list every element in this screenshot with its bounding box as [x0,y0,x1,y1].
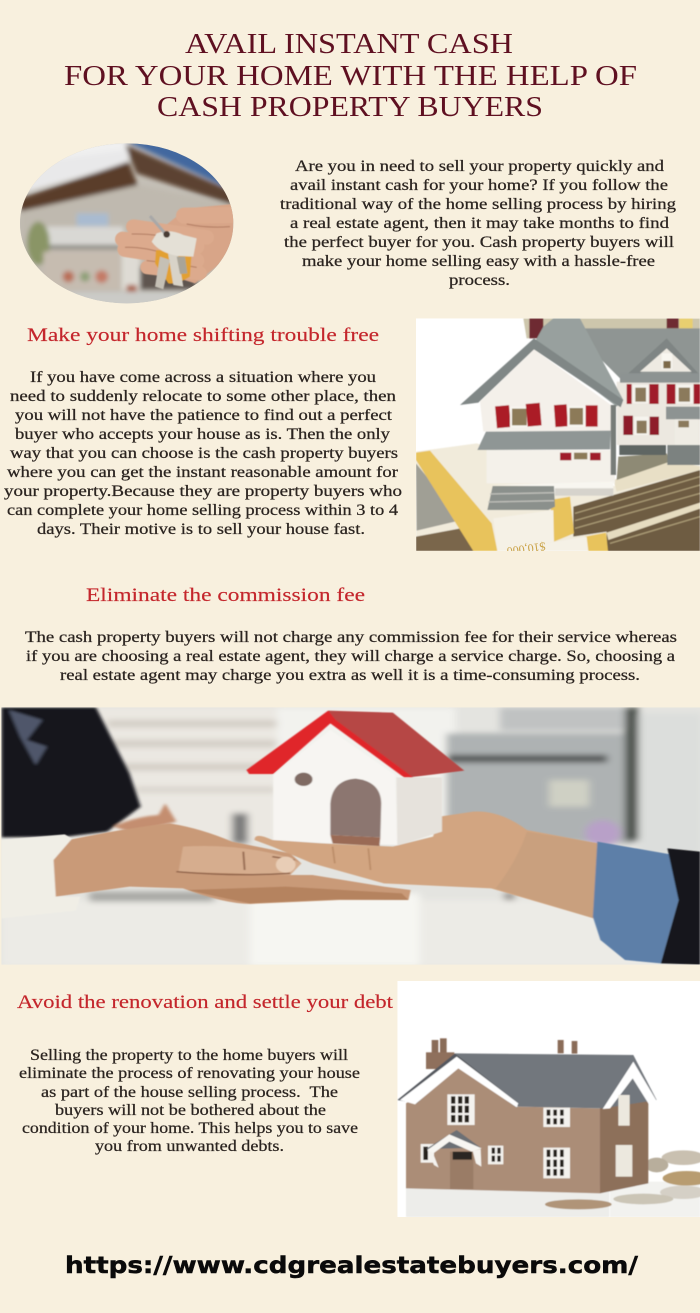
photo: oval house with hand holding keys [20,143,234,304]
paragraph: renovation and debt: buyers will not be bothered about the [55,1102,326,1119]
paragraph: commission fee: if you are choosing a real estate agent, they will charge a service charge. So, choosing a [26,648,675,665]
left cuff and hand [1,834,80,918]
heading: make your home shifting trouble free: Make your home shifting trouble free [27,326,379,346]
house walls [273,730,397,845]
paragraph: home shifting: way that you can choose is the cash property buyers [10,445,398,462]
paragraph: renovation and debt: you from unwanted debts. [95,1138,284,1155]
right hand and sleeve [254,812,598,918]
suit of person on left [1,707,176,837]
title: AVAIL INSTANT CASH [185,29,513,60]
intro paragraph: avail instant cash for your home? If you follow the [290,177,668,194]
intro paragraph: Are you in need to sell your property quickly and [295,158,664,175]
photo: two hands holding a small white house with red roof [1,707,700,967]
paragraph: home shifting [4,369,402,538]
paragraph: home shifting: need to suddenly relocate to some other place, then [10,388,396,405]
paragraph: renovation and debt: Selling the property to the home buyers will [30,1047,348,1064]
title: FOR YOUR HOME WITH THE HELP OF [64,61,637,92]
left house [534,318,623,407]
right house [585,328,700,378]
intro paragraph: process. [449,272,510,289]
intro paragraph: the perfect buyer for you. Cash property buyers will [284,234,674,251]
paragraph: home shifting: days. Their motive is to sell your house fast. [37,521,365,538]
paragraph: commission fee [25,629,677,684]
coins [662,1150,700,1165]
intro paragraph: a real estate agent, then it may take months to find [290,215,669,232]
photo: model houses on stacks of money [416,318,700,559]
paragraph: home shifting: can complete your home selling process within 3 to 4 [7,502,398,519]
intro paragraph: make your home selling easy with a hassle-free [302,253,655,270]
walls [406,1063,600,1193]
roof [455,1053,657,1108]
paragraph: renovation and debt: eliminate the process of renovating your house [19,1065,360,1082]
windows [447,1094,475,1125]
paragraph: home shifting: If you have come across a situation where you [30,369,376,386]
roof [328,711,464,777]
paragraph: renovation and debt: as part of the house selling process. The [41,1084,338,1101]
title: CASH PROPERTY BUYERS [157,92,543,123]
paragraph: home shifting: you will not have the patience to find out a perfect [15,407,393,424]
hand [160,204,233,283]
chimneys [432,1040,438,1053]
heading: eliminate the commission fee: Eliminate the commission fee [86,586,365,606]
keys [155,250,192,284]
intro paragraph: traditional way of the home selling process by hiring [280,196,676,213]
band print: $10,000 [506,539,546,559]
paragraph: home shifting: buyer who accepts your house as is. Then the only [15,426,390,443]
paragraph: home shifting: where you can get the instant reasonable amount for [7,464,399,481]
website url: https://www.cdgrealestatebuyers.com/ [65,1253,639,1279]
porch and door [450,1152,473,1189]
paragraph: renovation and debt [19,1047,360,1155]
photo: brown model house with coins [397,981,700,1217]
money stack [523,318,700,338]
heading: avoid the renovation and settle your debt: Avoid the renovation and settle your debt [17,993,394,1013]
paragraph: renovation and debt: condition of your home. This helps you to save [22,1120,358,1137]
title [64,29,637,123]
paragraph: home shifting: your property.Because they are property buyers who [4,483,402,500]
paragraph: commission fee: The cash property buyers will not charge any commission fee for their service whereas [25,629,677,646]
paragraph: commission fee: real estate agent may charge you extra as well it is a time-consuming process. [60,667,640,684]
intro paragraph [280,158,676,289]
